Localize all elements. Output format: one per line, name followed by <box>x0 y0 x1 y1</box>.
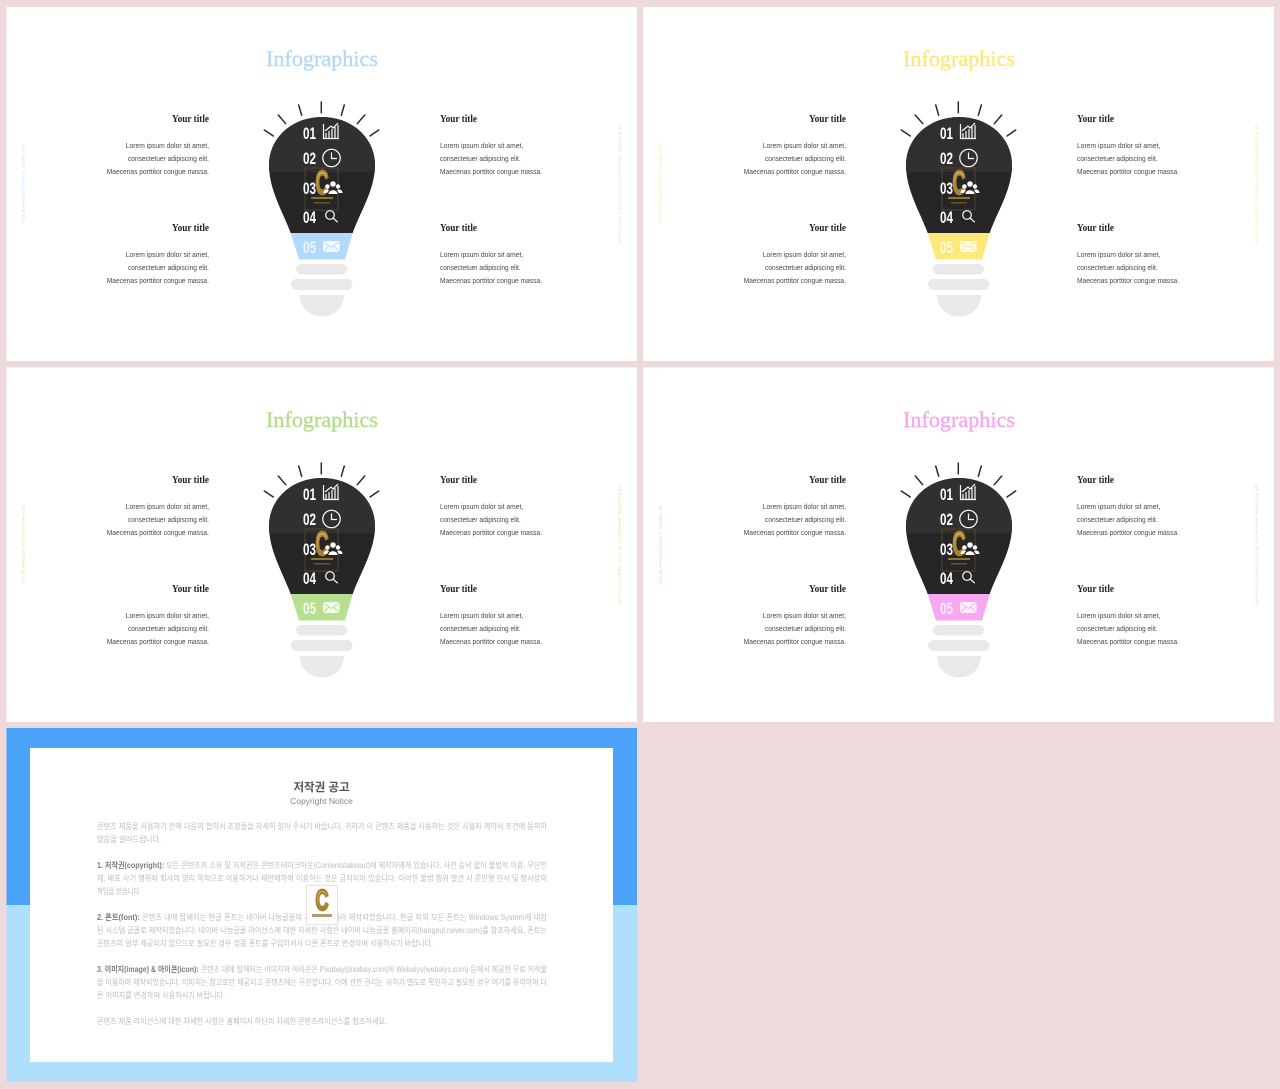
text block top right: consectetuer adipiscing elit. <box>440 156 521 163</box>
section 3: image and icon: 른 이미지를 변경하여 사용하시기 바랍니다. <box>97 990 225 1000</box>
light bulb graphic: 01 <box>940 485 953 504</box>
text block top left: consectetuer adipiscing elit. <box>765 517 846 524</box>
text block bottom left: Lorem ipsum dolor sit amet, <box>126 252 209 259</box>
copyright heading: 저작권 공고 <box>293 780 350 794</box>
text block top left <box>744 114 847 176</box>
light bulb graphic: 03 <box>940 540 953 559</box>
text block top left: Your title <box>172 114 210 125</box>
intro paragraph: 였음을 알려드립니다. <box>97 834 161 844</box>
light bulb graphic: 01 <box>303 124 316 143</box>
text block bottom right <box>1077 223 1179 285</box>
text block top right <box>440 114 542 176</box>
text block top left: Maecenas porttitor congue massa. <box>744 530 846 537</box>
text block bottom right: Your title <box>1077 223 1115 234</box>
light bulb graphic: 02 <box>940 149 953 168</box>
text block top right: Lorem ipsum dolor sit amet, <box>1077 504 1160 511</box>
text block bottom right: Lorem ipsum dolor sit amet, <box>440 613 523 620</box>
text block top left: Your title <box>809 475 847 486</box>
text block top right <box>1077 114 1179 176</box>
text block bottom left: Maecenas porttitor congue massa. <box>744 278 846 285</box>
side label left: YOUR PRESENTATION TEMPLATE <box>658 144 663 223</box>
text block top right: Your title <box>1077 475 1115 486</box>
text block bottom right <box>440 223 542 285</box>
text block bottom right: Maecenas porttitor congue massa. <box>1077 278 1179 285</box>
text block bottom right: consectetuer adipiscing elit. <box>440 626 521 633</box>
light bulb graphic: 03 <box>303 179 316 198</box>
text block bottom right <box>1077 584 1179 646</box>
text block bottom right: Maecenas porttitor congue massa. <box>440 639 542 646</box>
copyright subheading: Copyright Notice <box>290 796 353 806</box>
text block top left <box>107 475 210 537</box>
light bulb graphic: C <box>316 164 328 201</box>
text block top left: Lorem ipsum dolor sit amet, <box>126 504 209 511</box>
light bulb graphic: 02 <box>940 510 953 529</box>
text block bottom left: consectetuer adipiscing elit. <box>128 626 209 633</box>
light bulb graphic: 03 <box>940 179 953 198</box>
light bulb graphic <box>901 102 1016 316</box>
text block top right <box>1077 475 1179 537</box>
text block bottom right: Maecenas porttitor congue massa. <box>1077 639 1179 646</box>
light bulb graphic: 02 <box>303 510 316 529</box>
heading: Infographics <box>903 407 1015 432</box>
text block bottom right: Lorem ipsum dolor sit amet, <box>1077 613 1160 620</box>
text block bottom left: Your title <box>809 223 847 234</box>
text block bottom left: consectetuer adipiscing elit. <box>128 265 209 272</box>
text block top right: Maecenas porttitor congue massa. <box>440 530 542 537</box>
light bulb graphic <box>264 463 379 678</box>
light bulb graphic: 04 <box>303 569 316 588</box>
light bulb graphic: 03 <box>303 540 316 559</box>
heading: Infographics <box>903 46 1015 71</box>
section 2: font: 된 시스템 글꼴로 제작되었습니다. 네이버 나눔글꼴 라이선스에 대한 자세한 사항은 네이버 나눔글꼴 홈페이지(hangeul.naver.com)를 참조하세요. 폰트는 <box>97 925 547 935</box>
side label left: YOUR PRESENTATION TEMPLATE <box>21 144 26 223</box>
text block top right: consectetuer adipiscing elit. <box>1077 156 1158 163</box>
text block bottom left <box>107 223 210 285</box>
text block bottom left: Your title <box>809 584 847 595</box>
closing line: 콘텐츠 제품 라이선스에 대한 자세한 사항은 홈페이지 하단의 자세한 콘텐츠라이선스를 참조하세요. <box>97 1016 387 1026</box>
light bulb graphic: 04 <box>303 208 316 227</box>
section 3: image and icon: 을 이용하여 제작되었습니다. 이미지는 참고로만 제공되고 콘텐츠에는 무관합니다. 이에 관한 권리는 귀하가 별도로 확인하고 필요한 경우 여기를 유의하여 다 <box>97 977 548 987</box>
side label right: Lorem ipsum dolor sit amet, consectetuer adipiscing elit <box>1254 123 1259 244</box>
light bulb graphic: C <box>952 525 966 562</box>
panel: copyright notice <box>6 728 637 1082</box>
text block bottom right: Lorem ipsum dolor sit amet, <box>440 252 523 259</box>
side label left: YOUR PRESENTATION TEMPLATE <box>658 505 663 584</box>
light bulb graphic: 05 <box>940 599 953 618</box>
text block bottom left: Your title <box>172 584 210 595</box>
text block bottom left <box>107 584 210 646</box>
side label right: Lorem ipsum dolor sit amet, consectetuer adipiscing elit <box>617 484 622 605</box>
text block top right: Maecenas porttitor congue massa. <box>1077 530 1179 537</box>
light bulb graphic <box>901 463 1016 678</box>
text block top right <box>440 475 542 537</box>
light bulb graphic: C <box>952 164 966 201</box>
text block bottom left <box>744 584 847 646</box>
section 1: copyright: 재, 배포 사기 행위와 회사의 영리 목적으로 이용하거나 재판매하여 이용하는 것은 금지되어 있습니다. 이러한 불법 행위 발견 시 준민형 민사 및 형사상의 <box>97 873 547 883</box>
text block bottom left: consectetuer adipiscing elit. <box>765 265 846 272</box>
text block bottom right: Your title <box>440 584 478 595</box>
text block top left: Lorem ipsum dolor sit amet, <box>126 143 209 150</box>
section 1: copyright <box>97 860 547 896</box>
text block top right: Your title <box>1077 114 1115 125</box>
intro paragraph <box>97 821 548 844</box>
logo mark <box>306 885 338 924</box>
text block bottom right: Your title <box>1077 584 1115 595</box>
light bulb graphic: 04 <box>940 569 953 588</box>
text block top left: Lorem ipsum dolor sit amet, <box>763 504 846 511</box>
text block top right: consectetuer adipiscing elit. <box>1077 517 1158 524</box>
text block top left: Your title <box>172 475 210 486</box>
logo mark: C <box>316 885 329 917</box>
text block top right: Your title <box>440 114 478 125</box>
text block bottom left: Maecenas porttitor congue massa. <box>107 278 209 285</box>
light bulb graphic: 02 <box>303 149 316 168</box>
text block top left: Lorem ipsum dolor sit amet, <box>763 143 846 150</box>
section 3: image and icon: 3. 이미지(image) & 아이콘(icon): 콘텐츠 내에 탑재되는 이미지와 아이콘은 Pixabay(pixabay.com)와 Webalys(webalys.com) 등에서 제공한 무료 저작물 <box>97 964 547 974</box>
text block top right: Maecenas porttitor congue massa. <box>440 169 542 176</box>
text block bottom left <box>744 223 847 285</box>
text block bottom left: Lorem ipsum dolor sit amet, <box>763 613 846 620</box>
text block bottom right: Your title <box>440 223 478 234</box>
text block bottom left: Maecenas porttitor congue massa. <box>744 639 846 646</box>
section 1: copyright: 1. 저작권(copyright): 모든 콘텐츠의 소유 및 저작권은 콘텐츠테이크아웃(Contentstakeout)에 제작자에게 있습니다. 사전 승낙 없이 불법적 이용, 무단전 <box>97 860 547 870</box>
text block bottom left: Lorem ipsum dolor sit amet, <box>763 252 846 259</box>
light bulb graphic: 05 <box>303 238 316 257</box>
text block top right: consectetuer adipiscing elit. <box>440 517 521 524</box>
text block top right: Lorem ipsum dolor sit amet, <box>440 143 523 150</box>
section 3: image and icon <box>97 964 548 1000</box>
panel: pink infographic slide <box>643 368 1274 722</box>
text block bottom left: consectetuer adipiscing elit. <box>765 626 846 633</box>
side label right: Lorem ipsum dolor sit amet, consectetuer adipiscing elit <box>617 123 622 244</box>
text block bottom right: consectetuer adipiscing elit. <box>440 265 521 272</box>
light bulb graphic: 05 <box>303 599 316 618</box>
text block top left: Maecenas porttitor congue massa. <box>107 169 209 176</box>
text block top left: Your title <box>809 114 847 125</box>
light bulb graphic: C <box>316 525 328 562</box>
panel: green infographic slide <box>6 368 637 722</box>
light bulb graphic: 04 <box>940 208 953 227</box>
text block top left <box>744 475 847 537</box>
light bulb graphic: 01 <box>940 124 953 143</box>
text block bottom left: Your title <box>172 223 210 234</box>
section 1: copyright: 책임을 받습니다. <box>97 886 141 896</box>
text block bottom right: consectetuer adipiscing elit. <box>1077 265 1158 272</box>
intro paragraph: 콘텐츠 제품을 사용하기 전에 다음의 협약서 조항들을 자세히 읽어 주시기 바랍니다. 귀하가 이 콘텐츠 제품을 사용하는 것은 사용자 계약서 조건에 동의하 <box>97 821 548 831</box>
section 2: font: 콘텐츠의 일부 제공되지 않으므로 필요한 경우 정품 폰트를 구입하셔서 다른 폰트로 변경하여 사용하시기 바랍니다. <box>97 938 433 948</box>
heading: Infographics <box>266 46 378 71</box>
text block top right: Lorem ipsum dolor sit amet, <box>1077 143 1160 150</box>
light bulb graphic: 05 <box>940 238 953 257</box>
text block top left <box>107 114 210 176</box>
side label left: YOUR PRESENTATION TEMPLATE <box>21 505 26 584</box>
text block top right: Your title <box>440 475 478 486</box>
text block bottom right: consectetuer adipiscing elit. <box>1077 626 1158 633</box>
section 2: font: 2. 폰트(font): 콘텐츠 내에 탑재되는 한글 폰트는 네이버 나눔글꼴의 저작권을 따라 제작되었습니다. 한글 외의 모든 폰트는 Windows System에 내장 <box>97 912 548 922</box>
text block bottom right: Lorem ipsum dolor sit amet, <box>1077 252 1160 259</box>
text block top left: consectetuer adipiscing elit. <box>765 156 846 163</box>
text block bottom left: Lorem ipsum dolor sit amet, <box>126 613 209 620</box>
text block top right: Maecenas porttitor congue massa. <box>1077 169 1179 176</box>
light bulb graphic: 01 <box>303 485 316 504</box>
text block bottom left: Maecenas porttitor congue massa. <box>107 639 209 646</box>
text block bottom right: Maecenas porttitor congue massa. <box>440 278 542 285</box>
text block top left: consectetuer adipiscing elit. <box>128 156 209 163</box>
panel: yellow infographic slide <box>643 7 1274 361</box>
light bulb graphic <box>264 102 379 316</box>
text block top left: Maecenas porttitor congue massa. <box>107 530 209 537</box>
text block top left: Maecenas porttitor congue massa. <box>744 169 846 176</box>
text block bottom right <box>440 584 542 646</box>
heading: Infographics <box>266 407 378 432</box>
side label right: Lorem ipsum dolor sit amet, consectetuer adipiscing elit <box>1254 484 1259 605</box>
section 2: font <box>97 912 548 948</box>
text block top right: Lorem ipsum dolor sit amet, <box>440 504 523 511</box>
text block top left: consectetuer adipiscing elit. <box>128 517 209 524</box>
panel: blue infographic slide <box>6 7 637 361</box>
